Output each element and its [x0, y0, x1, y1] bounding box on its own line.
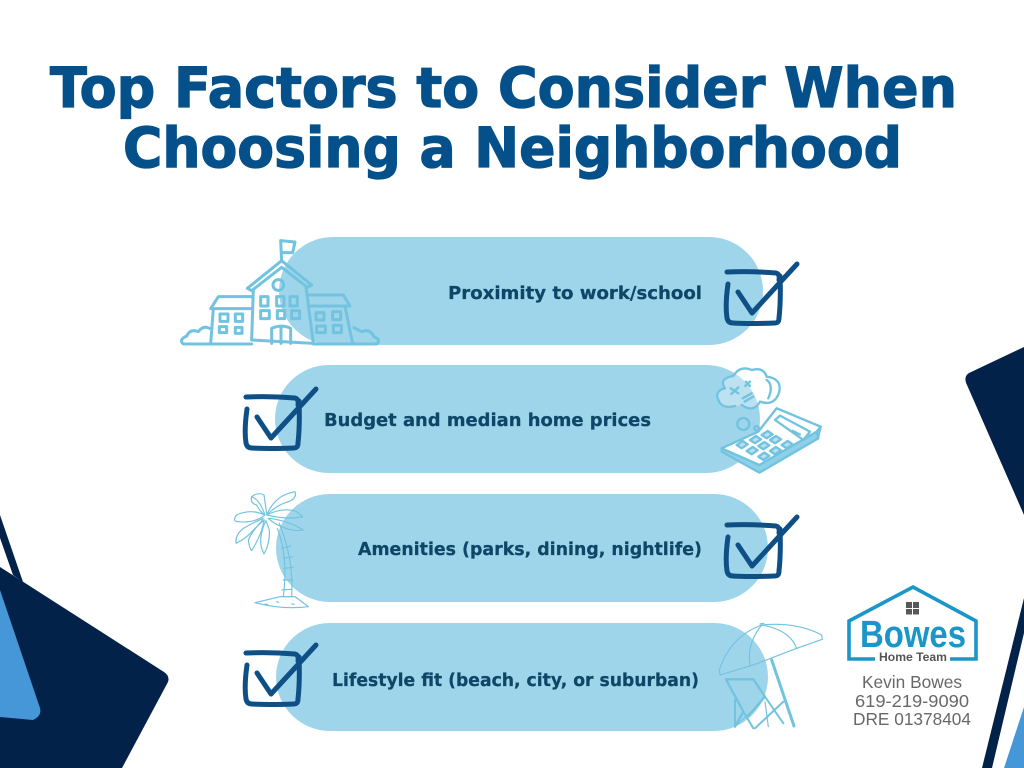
panel: proximity to work/school [279, 237, 763, 345]
decoration: right navy shapes [965, 347, 1024, 768]
logo: Bowes Home Team [849, 587, 976, 664]
label: amenities: Amenities (parks, dining, nightlife) [358, 539, 702, 560]
icon: checkbox 3 [726, 517, 797, 576]
icon: checkbox 2 [245, 389, 316, 448]
icon: palm tree [235, 492, 308, 608]
contact details [853, 672, 971, 729]
icon: school [181, 241, 379, 344]
title: Choosing a Neighborhood [123, 116, 902, 180]
label: budget: Budget and median home prices [324, 410, 651, 431]
icon: calculator and cloud [717, 368, 821, 473]
icon: beach umbrella and chair [719, 623, 822, 728]
title [50, 56, 957, 180]
panel: budget and median home prices [275, 365, 760, 473]
logo tagline: Home Team [879, 650, 947, 664]
label: proximity: Proximity to work/school [448, 283, 702, 304]
contact details: Kevin Bowes [862, 672, 962, 692]
decoration: bottom-left navy shapes [0, 515, 168, 768]
icon: checkbox 1 [726, 264, 797, 324]
panel: amenities [276, 494, 768, 602]
logo windows [906, 602, 919, 614]
title: Top Factors to Consider When [50, 56, 957, 120]
contact details: DRE 01378404 [853, 709, 971, 729]
label: lifestyle: Lifestyle fit (beach, city, or suburban) [332, 670, 699, 691]
icon: checkbox 4 [245, 645, 316, 704]
panel: lifestyle fit [276, 623, 768, 731]
contact details: 619-219-9090 [855, 691, 969, 711]
logo wordmark: Bowes [860, 614, 966, 656]
